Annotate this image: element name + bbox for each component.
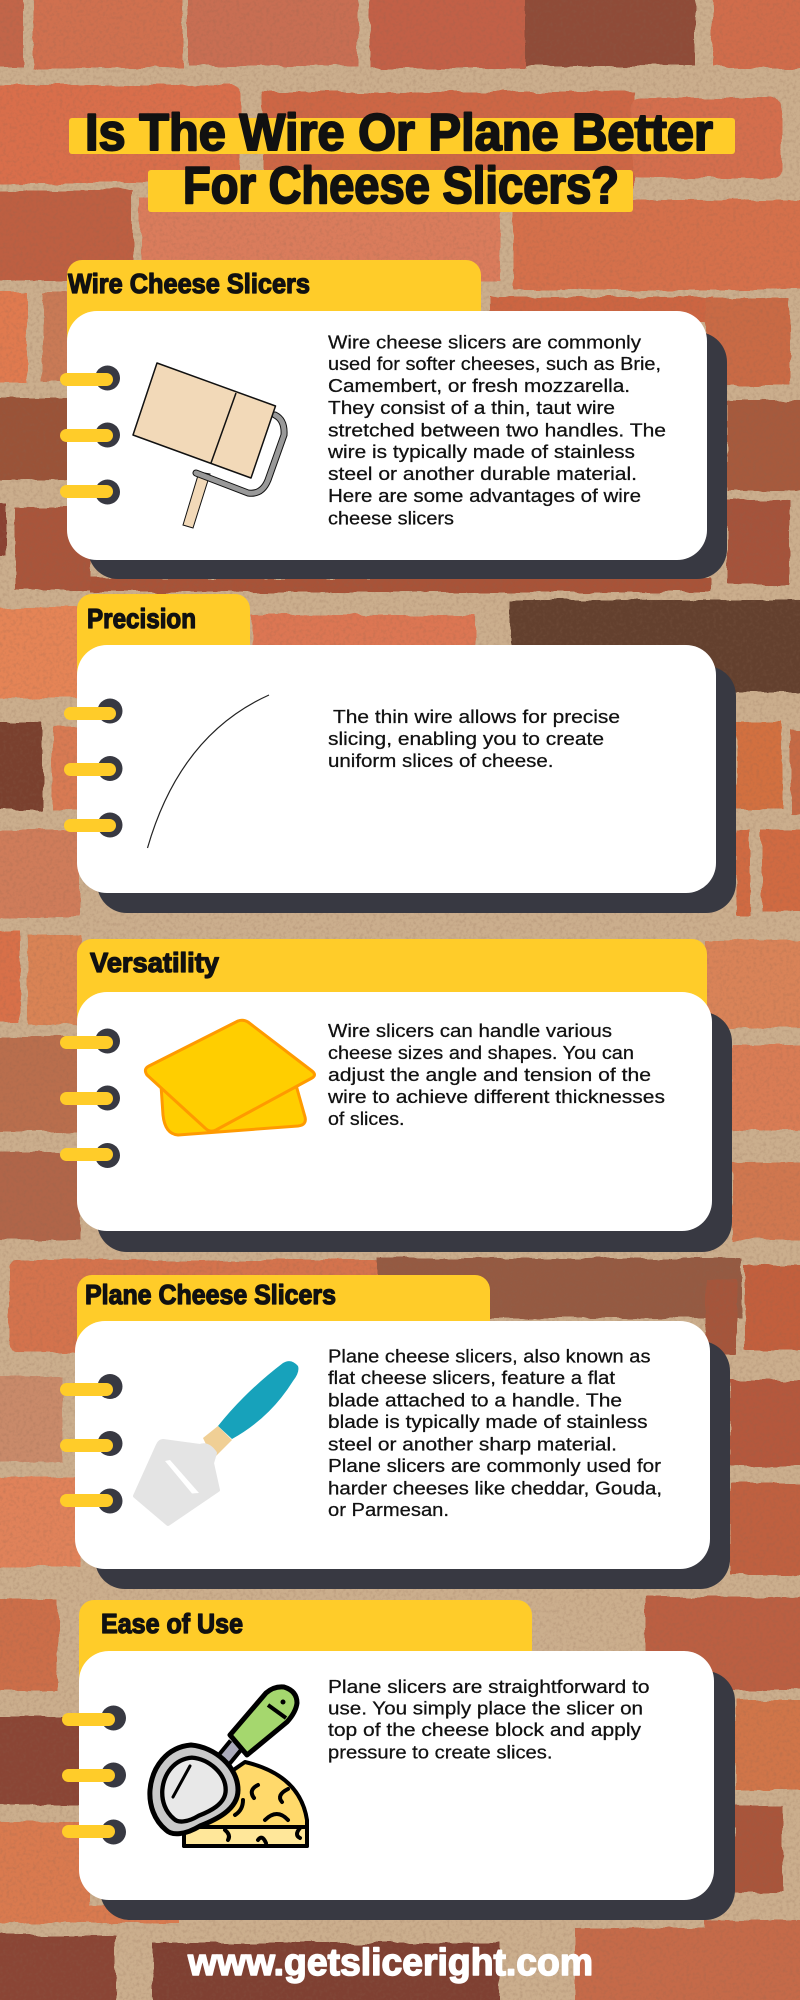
heading: wire cheese slicers: Wire Cheese Slicers (68, 268, 310, 299)
title: Is The Wire Or Plane Better (85, 104, 713, 162)
heading: versatility: Versatility (90, 947, 219, 978)
body text: Plane cheese slicers, also known as (328, 1346, 650, 1366)
body text (328, 1677, 650, 1762)
body text: adjust the angle and tension of the (328, 1065, 651, 1085)
icon: wire curve (148, 695, 269, 848)
body text: They consist of a thin, taut wire (328, 398, 615, 418)
body text: used for softer cheeses, such as Brie, (328, 354, 661, 374)
icon: wire slicer on cheese block (133, 363, 284, 528)
heading: precision: Precision (87, 603, 196, 634)
body text: harder cheeses like cheddar, Gouda, (328, 1478, 662, 1498)
body text (328, 707, 620, 771)
body text: slicing, enabling you to create (328, 729, 604, 749)
body text: stretched between two handles. The (328, 420, 666, 440)
body text: The thin wire allows for precise (333, 707, 620, 727)
title: For Cheese Slicers? (183, 157, 619, 215)
body text: pressure to create slices. (328, 1742, 552, 1762)
body text: flat cheese slicers, feature a flat (328, 1368, 615, 1388)
body text: blade is typically made of stainless (328, 1412, 648, 1432)
body text: steel or another durable material. (328, 464, 637, 484)
body text: wire is typically made of stainless (327, 442, 635, 462)
binder rings (60, 1028, 120, 1168)
heading: plane cheese slicers: Plane Cheese Slicers (85, 1279, 336, 1310)
icon: plane cheese slicer (135, 1361, 298, 1524)
body text (327, 1021, 665, 1129)
title (69, 104, 735, 215)
body text: Plane slicers are commonly used for (328, 1456, 661, 1476)
body text: Wire slicers can handle various (328, 1021, 612, 1041)
body text: or Parmesan. (328, 1500, 449, 1520)
body text: wire to achieve different thicknesses (327, 1087, 665, 1107)
website url: www.getsliceright.com (187, 1942, 593, 1984)
body text: blade attached to a handle. The (328, 1390, 622, 1410)
mid rows (0, 607, 80, 698)
body text: steel or another sharp material. (328, 1434, 617, 1454)
body text: Plane slicers are straightforward to (328, 1677, 650, 1697)
body text: Here are some advantages of wire (328, 486, 641, 506)
icon: slicer on cheese wedge (150, 1687, 307, 1846)
binder rings (60, 366, 120, 504)
panel: precision (64, 594, 736, 913)
body text: cheese sizes and shapes. You can (328, 1043, 634, 1063)
panel: ease of use (62, 1600, 735, 1920)
binder rings (60, 1374, 122, 1514)
body text: Camembert, or fresh mozzarella. (328, 376, 630, 396)
panel: plane cheese slicers (60, 1275, 730, 1589)
body text (328, 1346, 662, 1520)
body text: use. You simply place the slicer on (328, 1698, 643, 1718)
body text: top of the cheese block and apply (328, 1720, 641, 1740)
body text (327, 332, 666, 528)
body text: uniform slices of cheese. (328, 751, 554, 771)
top rows (0, 0, 23, 68)
body text: Wire cheese slicers are commonly (328, 332, 641, 352)
heading: ease of use: Ease of Use (101, 1608, 243, 1639)
binder rings (62, 1706, 126, 1844)
icon: cheese slices (145, 1020, 314, 1135)
panel: wire cheese slicers (60, 260, 727, 579)
body text: of slices. (328, 1109, 404, 1129)
body text: cheese slicers (328, 508, 454, 528)
lower rows (10, 1260, 380, 1352)
panel: versatility (60, 939, 732, 1252)
binder rings (64, 698, 122, 838)
